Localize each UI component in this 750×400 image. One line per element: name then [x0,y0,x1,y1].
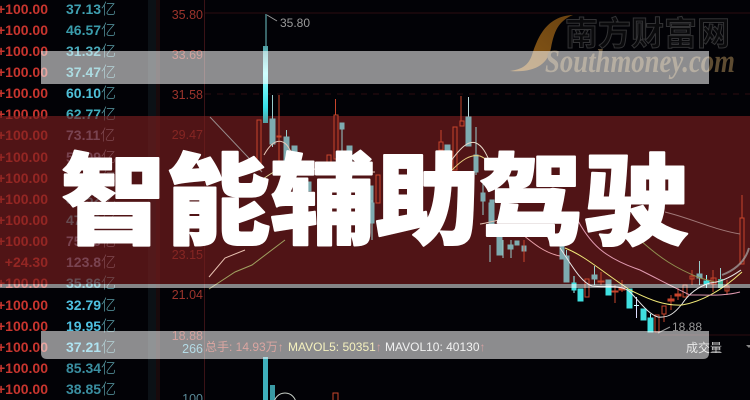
volume legend strip: MAVOL10: 40130↑ [385,340,486,354]
left column: turnover values: 85.34亿 [66,357,116,378]
price axis labels: 35.80 [172,8,203,22]
volume legend strip: 成交量 [686,339,722,356]
left column: percent changes [0,1,48,397]
price axis labels: 18.88 [172,329,203,343]
left column: turnover values: 123.8亿 [66,251,116,272]
bottom gray band [41,331,709,359]
volume legend strip: 266 [182,342,203,356]
label: low price 18.88 [658,320,702,334]
red title band [0,116,750,284]
volume legend strip: MAVOL5: 50351↑ [288,340,382,354]
price axis labels: 23.15 [172,248,203,262]
left column: turnover values: 38.52亿 [66,188,116,209]
top gray band [41,51,709,84]
left column: turnover values: 41.27亿 [66,167,116,188]
left column: turnover values: 32.79亿 [66,294,116,315]
price axis labels: 21.04 [172,288,203,302]
label: high price 35.80 [267,15,310,30]
left column: turnover values: 31.32亿 [66,40,116,61]
left column: turnover values: 35.86亿 [66,272,116,293]
gray strip under red band [0,284,750,288]
left column: turnover values: 37.21亿 [66,336,116,357]
price axis labels: 31.58 [172,88,203,102]
moving average lines [209,117,742,317]
left column: turnover values [66,0,116,399]
left column: turnover values: 60.10亿 [66,82,116,103]
left column: turnover values: 19.95亿 [66,315,116,336]
price axis labels: 29.47 [172,128,203,142]
left column: turnover values: 62.77亿 [66,103,116,124]
candlestick chart [257,14,744,332]
left column: turnover values: 47.12亿 [66,209,116,230]
label: high price 35.80: 35.80 [280,16,310,30]
left column: turnover values: 73.11亿 [66,124,115,145]
left column: turnover values: 56.09亿 [66,146,116,167]
column separators [148,0,205,400]
volume legend strip: 总手: 14.93万↑ [205,340,284,354]
rounded band corner [722,248,749,275]
price axis labels [172,8,203,343]
price axis labels: 33.69 [172,48,203,62]
volume legend strip [182,339,750,356]
left column: turnover values: 75.30亿 [66,230,116,251]
left column: percent changes: +24.30 [5,254,48,270]
left column: turnover values: 38.85亿 [66,378,116,399]
volume bars [182,357,338,400]
left column: turnover values: 46.57亿 [66,19,116,40]
price grid lines [205,13,750,335]
label: low price 18.88: 18.88 [672,320,702,334]
left column: turnover values: 37.47亿 [66,61,116,82]
title: 智能辅助驾驶 [61,121,689,265]
watermark: southmoney logo [510,7,735,80]
watermark: southmoney logo: 南方财富网 [565,7,730,55]
